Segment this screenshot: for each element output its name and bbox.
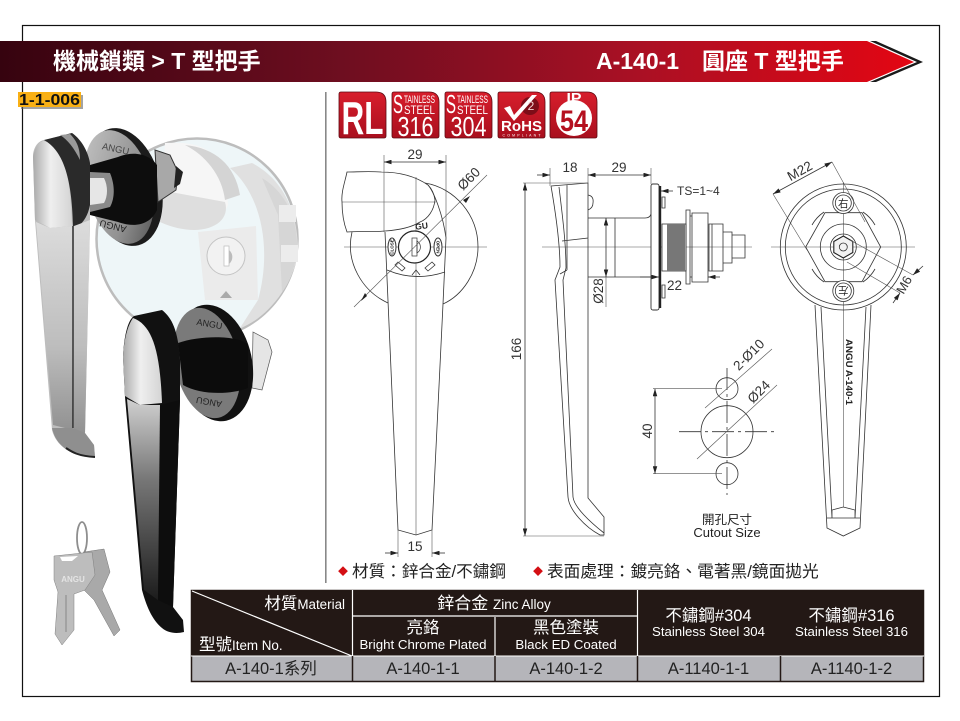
dimension: TS: TS=1~4: [677, 184, 720, 198]
dimension: diameter 24: [697, 377, 777, 459]
vertical divider: [325, 92, 327, 583]
badge: stainless steel 316: TAINLESS: [404, 94, 435, 106]
drawing: front view: CLOSE: [390, 239, 395, 255]
badge: IP54: 54: [560, 105, 588, 138]
dimension: diameter 24: Ø24: [744, 377, 773, 406]
badge: stainless steel 304: 304: [450, 111, 486, 142]
disk: [74, 120, 174, 254]
heading: product: A-140-1: [596, 48, 679, 74]
spec table: Bright Chrome Plated: [359, 637, 487, 652]
spec table: A-1140-1-1: [668, 660, 749, 678]
photo: keys: ANGU: [61, 575, 85, 584]
badge: RoHS: COMPLIANT: [502, 134, 541, 138]
drawing: front view: OPEN: [435, 241, 440, 253]
dimension: 40: 40: [640, 423, 655, 439]
spec table: A-140-1-2: [529, 660, 603, 678]
spec table: A-1140-1-2: [811, 660, 892, 678]
photo: keys: [54, 522, 120, 645]
dimension: 18 and 29: [537, 160, 651, 186]
header: chrome: 亮鉻: [406, 618, 440, 637]
disk: [252, 332, 272, 390]
dimension: 166: 166: [509, 338, 524, 360]
mark: right: [833, 192, 854, 214]
spec table: Black ED Coated: [515, 637, 617, 652]
mark: left: 左: [838, 284, 849, 297]
photo: magnified lens: [96, 138, 298, 340]
badge: IP54: [550, 90, 597, 138]
header: steel 304: 不鏽鋼#304: [665, 606, 752, 625]
header: material: 材質Material: [264, 594, 345, 613]
badge: stainless steel 316: [392, 89, 439, 142]
dimension: diameter 28: [591, 218, 606, 307]
heading: category: 機械鎖類 > T 型把手: [53, 48, 261, 74]
badge: RoHS: [498, 92, 545, 138]
photo: chrome handle: ANGU: [101, 141, 130, 158]
dimension: 29: 29: [407, 147, 423, 162]
mark: left: [833, 280, 854, 302]
photo: black handle: [123, 297, 272, 633]
badge: stainless steel 316: S: [393, 89, 403, 119]
spec table: Stainless Steel 316: [795, 624, 908, 639]
drawing: rear view: [771, 158, 923, 536]
spec table: A-140-1-1: [386, 660, 460, 678]
badge: stainless steel 304: S: [446, 89, 456, 119]
badge: RoHS: 2: [528, 99, 535, 113]
dimension: 18 and 29: 18: [562, 160, 578, 175]
dimension: 29: [384, 147, 446, 238]
header: black: 黑色塗裝: [533, 618, 599, 637]
caption: 開孔尺寸: [702, 513, 752, 527]
badge: stainless steel 316: 316: [398, 111, 434, 142]
badge: RoHS: RoHS: [501, 118, 542, 135]
photo: chrome handle: ANGU: [98, 217, 128, 234]
badge: RL: [339, 92, 386, 144]
dimension: 15: 15: [407, 539, 423, 554]
dimension: 2-diameter 10: [705, 336, 772, 408]
dimension: M22: M22: [785, 158, 815, 184]
dimension: 22: 22: [667, 278, 682, 293]
badge: IP54: IP: [566, 90, 582, 107]
dimension: diameter 28: Ø28: [591, 278, 606, 304]
spec table: [191, 590, 924, 682]
badge: stainless steel 304: [445, 89, 492, 142]
badge: stainless steel 304: STEEL: [457, 103, 488, 117]
spec line: material and finish: 表面處理：鍍亮鉻、電著黑/鏡面拋光: [547, 561, 819, 581]
badge: stainless steel 304: TAINLESS: [457, 94, 488, 106]
header: item no: 型號Item No.: [199, 635, 283, 654]
dimension: 166: [509, 183, 604, 536]
dimension: diameter 60: [354, 164, 487, 307]
engraved model text: ANGU A-140-1: [843, 339, 854, 406]
drawing: front view: [342, 147, 487, 557]
mark: right: 右: [838, 197, 849, 210]
drawing: cutout size: Cutout Size: [693, 525, 761, 540]
dimension: M22: [773, 158, 865, 250]
drawing: cutout size: [640, 336, 777, 540]
heading: product: 圓座 T 型把手: [702, 48, 844, 74]
spec line: material and finish: [338, 561, 819, 581]
title banner: [0, 41, 923, 82]
photo: chrome handle: [33, 120, 183, 457]
drawing: side view: [509, 160, 752, 536]
row values: A-140-1系列: [225, 659, 317, 678]
dimension: 40: [640, 389, 722, 474]
badge: RL: RL: [342, 92, 384, 144]
photo: black handle: ANGU: [196, 317, 223, 331]
photo: black handle: ANGU: [195, 395, 223, 409]
spec line: material and finish: ◆: [338, 566, 348, 578]
dimension: M6: M6: [893, 273, 915, 296]
drawing: front view: GU: [415, 220, 429, 232]
header: zinc alloy: 鋅合金 Zinc Alloy: [437, 594, 551, 613]
dimension: 18 and 29: 29: [611, 160, 627, 175]
dimension: diameter 60: Ø60: [454, 164, 483, 193]
spec line: material and finish: ◆: [533, 566, 543, 578]
spec line: material and finish: 材質：鋅合金/不鏽鋼: [352, 562, 506, 581]
dimension: 15: [385, 530, 445, 557]
spec table: Stainless Steel 304: [652, 624, 765, 639]
dimension: M6: [847, 240, 923, 303]
dimension: 22: [640, 277, 720, 293]
header: steel 316: 不鏽鋼#316: [808, 606, 895, 625]
catalog code tag: 1-1-006: [19, 92, 80, 109]
dimension: 2-diameter 10: 2-Ø10: [730, 336, 767, 373]
certification badges: [339, 89, 597, 144]
badge: stainless steel 316: STEEL: [404, 103, 435, 117]
